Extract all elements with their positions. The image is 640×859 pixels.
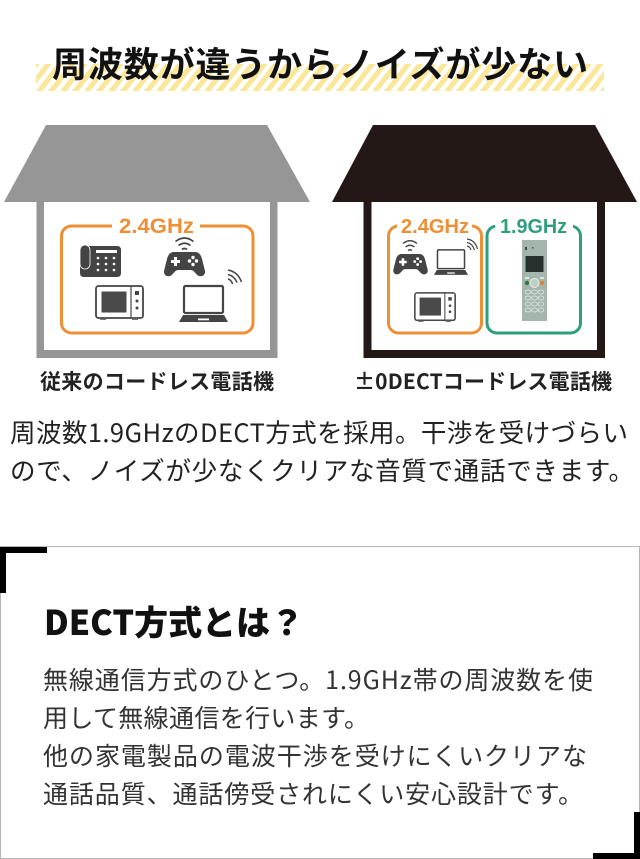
walls <box>364 202 605 358</box>
icon: desk phone <box>80 245 121 277</box>
corner: bottom right <box>593 812 640 859</box>
icon: laptop with wifi <box>179 270 242 322</box>
intro text: ので、ノイズが少なくクリアな音質で通話できます。 <box>10 451 634 488</box>
icon: DECT handset <box>522 240 547 321</box>
body text: 用して無線通信を行います。 <box>43 699 369 735</box>
icon: game controller with wifi <box>393 241 428 274</box>
intro text <box>10 413 634 488</box>
panel: DECT explanation <box>0 546 640 859</box>
2.4GHz frame: 2.4GHz <box>401 216 469 238</box>
panel border <box>0 546 640 858</box>
heading: DECT方式とは？ <box>44 596 304 645</box>
2.4GHz frame: 2.4GHz <box>119 215 194 238</box>
title stripe band <box>36 64 604 91</box>
2.4GHz frame <box>388 216 482 333</box>
body text <box>43 661 593 811</box>
label: conventional phone: 従来のコードレス電話機 <box>40 366 274 396</box>
label: DECT phone: ±0DECTコードレス電話機 <box>354 366 612 396</box>
roof <box>332 125 637 202</box>
panel: conventional house <box>4 125 310 358</box>
1.9GHz frame <box>487 216 580 333</box>
1.9GHz frame: 1.9GHz <box>500 216 567 238</box>
panel: DECT house <box>332 125 637 358</box>
icon: laptop with wifi <box>434 239 478 275</box>
icon: game controller with wifi <box>164 238 205 276</box>
body text: 他の家電製品の電波干渉を受けにくいクリアな <box>43 737 587 773</box>
title <box>36 37 604 91</box>
intro text: 周波数1.9GHzのDECT方式を採用。干渉を受けづらい <box>10 413 628 450</box>
corner: top left <box>0 547 47 593</box>
walls <box>36 202 278 358</box>
body text: 通話品質、通話傍受されにくい安心設計です。 <box>43 775 583 811</box>
icon: microwave <box>415 293 455 322</box>
roof <box>4 125 310 202</box>
2.4GHz frame <box>62 215 253 333</box>
title text: 周波数が違うからノイズが少ない <box>52 37 588 88</box>
body text: 無線通信方式のひとつ。1.9GHz帯の周波数を使 <box>43 661 593 697</box>
icon: microwave <box>96 286 143 320</box>
